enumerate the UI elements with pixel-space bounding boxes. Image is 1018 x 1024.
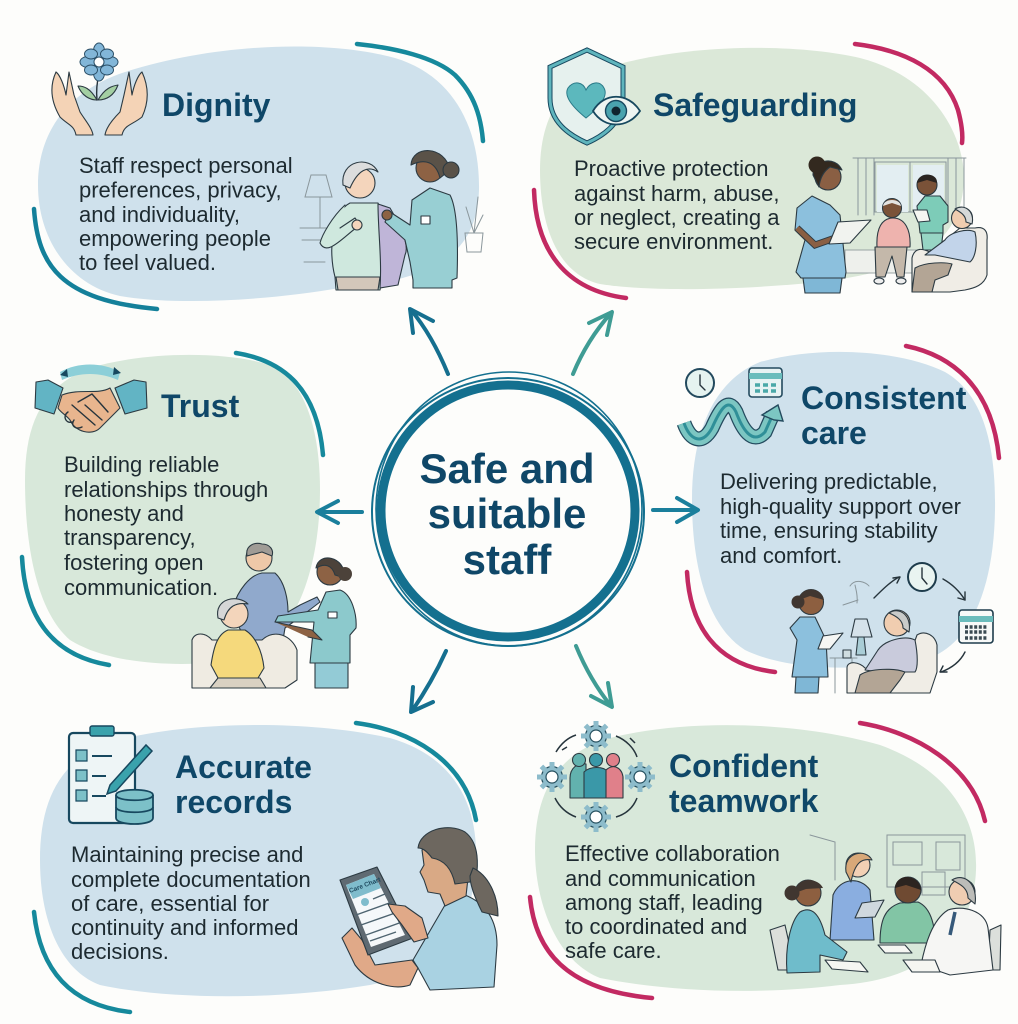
icon: hands and flower xyxy=(52,43,147,135)
text: Trust: communication. xyxy=(64,575,218,600)
central title: suitable xyxy=(428,490,586,537)
panel: Accurate records xyxy=(34,723,498,1012)
panel: Dignity xyxy=(34,43,483,309)
text: Dignity: preferences, privacy, xyxy=(79,178,282,202)
text: Safeguarding: or neglect, creating a xyxy=(574,205,780,230)
arrow: to Confident teamwork xyxy=(576,646,612,707)
text: Trust: fostering open xyxy=(64,550,203,575)
text: Confident teamwork: and communication xyxy=(565,866,756,891)
text: Accurate records: Maintaining precise and xyxy=(71,842,303,867)
central circle xyxy=(372,372,644,646)
text: Dignity: and individuality, xyxy=(79,202,240,227)
panel background: Consistent care xyxy=(692,352,995,668)
text: Trust: transparency, xyxy=(64,525,196,550)
heading: Trust: Trust xyxy=(161,388,240,424)
panel: Consistent care xyxy=(684,346,999,693)
text: Accurate records: of care, essential for xyxy=(71,891,269,916)
text: Trust: Building reliable xyxy=(64,452,219,477)
text: Dignity: to feel valued. xyxy=(79,250,216,275)
icon: checklist and database xyxy=(69,726,153,824)
accent arcs: Confident teamwork xyxy=(530,723,985,998)
panel: Trust xyxy=(22,353,356,688)
text: Accurate records: complete documentation xyxy=(71,867,311,892)
heading: Consistent care: care xyxy=(801,415,867,451)
text: Confident teamwork: Effective collaboration xyxy=(565,841,780,866)
panel background: Dignity xyxy=(38,46,479,301)
heading: Consistent care: Consistent xyxy=(801,380,967,416)
heading: Confident teamwork: teamwork xyxy=(669,783,819,819)
accent arcs: Safeguarding xyxy=(534,44,962,298)
heading: Accurate records: records xyxy=(175,784,292,820)
panel background: Confident teamwork xyxy=(535,725,976,991)
illustration: nurse with tablet: Care Chart xyxy=(348,876,383,895)
accent arcs: Dignity xyxy=(34,44,483,309)
heading: Accurate records: Accurate xyxy=(175,749,312,785)
accent arcs: Consistent care xyxy=(687,346,999,672)
heading: Safeguarding: Safeguarding xyxy=(653,87,857,123)
text: Safeguarding: Proactive protection xyxy=(574,156,768,181)
text: Dignity: empowering people xyxy=(79,226,271,251)
illustration: nurse with tablet xyxy=(340,828,498,990)
text: Confident teamwork: to coordinated and xyxy=(565,914,747,939)
text: Confident teamwork: among staff, leading xyxy=(565,890,763,915)
text: Confident teamwork: safe care. xyxy=(565,938,662,963)
text: Safeguarding: against harm, abuse, xyxy=(574,181,779,206)
illustration: resident and carer xyxy=(300,151,483,290)
icon: handshake xyxy=(35,364,147,432)
accent arcs: Accurate records xyxy=(34,723,476,1012)
panel background: Trust xyxy=(25,355,320,664)
text: Accurate records: continuity and informed xyxy=(71,915,298,940)
arrow: to Accurate records xyxy=(411,651,446,712)
panel background: Safeguarding xyxy=(540,48,964,289)
panel: Safeguarding xyxy=(534,44,987,298)
text: Accurate records: decisions. xyxy=(71,939,169,964)
illustration: team meeting xyxy=(770,835,1001,975)
heading: Confident teamwork: Confident xyxy=(669,748,819,784)
text: Dignity: Staff respect personal xyxy=(79,153,293,178)
arrow: to Dignity xyxy=(410,309,448,374)
icon: team and gears xyxy=(537,721,655,832)
text: Safeguarding: secure environment. xyxy=(574,229,773,254)
panel background: Accurate records xyxy=(40,725,476,996)
central title: staff xyxy=(463,536,552,583)
heading: Dignity: Dignity xyxy=(162,87,271,123)
central title: Safe and xyxy=(419,445,595,492)
text: Consistent care: and comfort. xyxy=(720,543,842,568)
text: Trust: honesty and xyxy=(64,501,184,526)
arrow: to Trust xyxy=(317,501,362,523)
arrow: to Safeguarding xyxy=(573,312,612,374)
illustration: nurse, resident, clock and calendar xyxy=(790,563,993,693)
icon: shield and eye xyxy=(550,50,640,143)
panel: Confident teamwork xyxy=(530,721,1001,998)
icon: clock, calendar and wave xyxy=(684,368,783,439)
text: Consistent care: Delivering predictable, xyxy=(720,469,938,494)
text: Trust: relationships through xyxy=(64,477,268,502)
illustration: resident, relative and nurse xyxy=(192,543,356,688)
illustration: nurse and residents xyxy=(795,156,987,293)
text: Consistent care: time, ensuring stability xyxy=(720,518,938,543)
accent arcs: Trust xyxy=(22,353,323,665)
arrow: to Consistent care xyxy=(653,498,698,522)
text: Consistent care: high-quality support over xyxy=(720,494,961,519)
